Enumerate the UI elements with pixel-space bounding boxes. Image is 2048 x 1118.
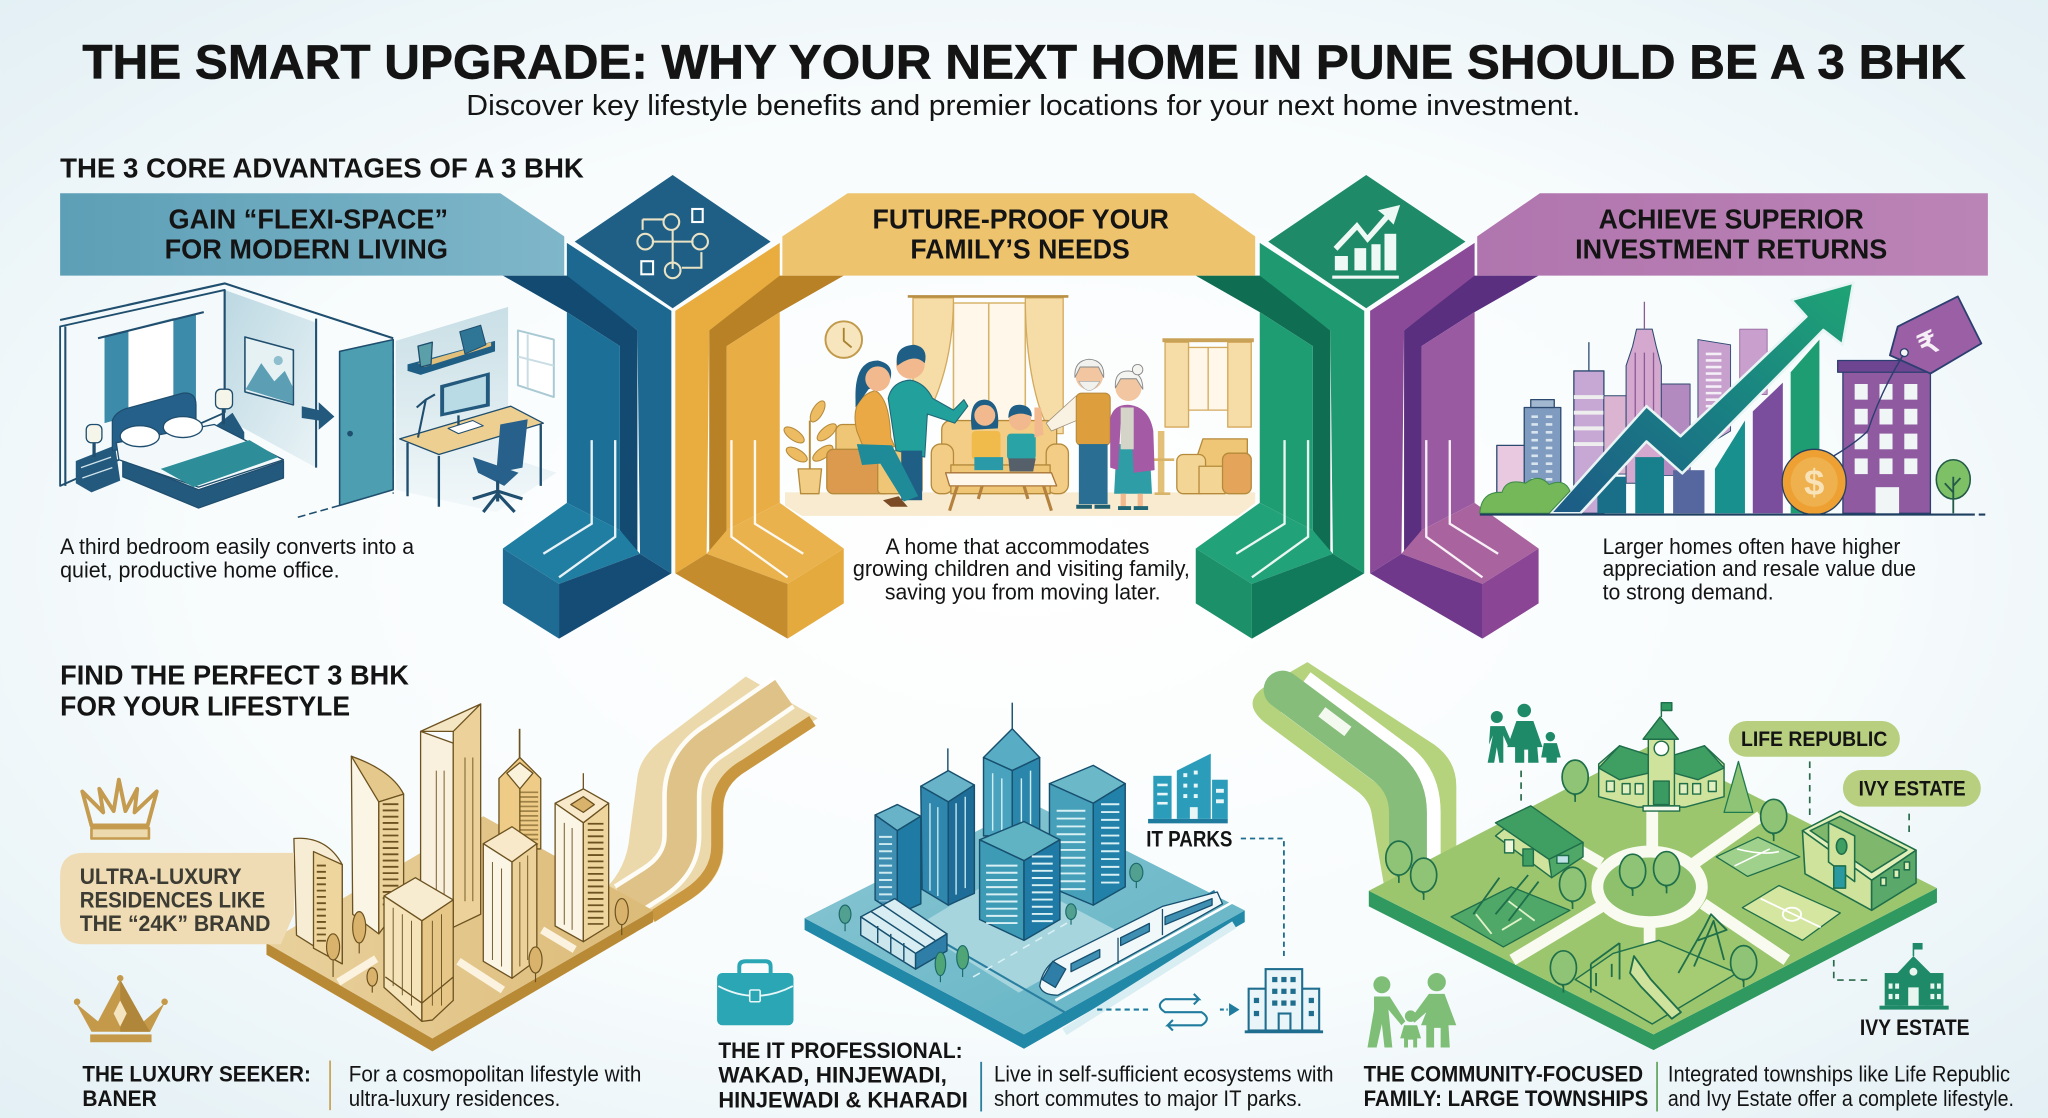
illustration: bedroom converts to office <box>60 283 556 517</box>
golden road <box>603 677 818 922</box>
tower: spire <box>499 729 541 849</box>
grandmother <box>1110 364 1155 508</box>
township trees <box>1386 760 1787 993</box>
panel: community township <box>1253 662 1937 1050</box>
text: flexi-space benefit <box>60 534 415 582</box>
icon: outline crown <box>82 780 157 838</box>
text: IT professional: THE IT PROFESSIONAL: <box>718 1038 963 1063</box>
coffee table <box>946 473 1057 511</box>
icon: light green family <box>1367 973 1456 1047</box>
icon: dark green family <box>1488 704 1561 763</box>
icon: IT parks buildings <box>1148 754 1228 823</box>
price tag with rupee: ₹ <box>1913 325 1944 363</box>
banner: flexi-space <box>60 193 564 276</box>
wall picture <box>245 337 293 405</box>
illustration: city skyline with rising arrow <box>1480 283 1985 515</box>
teal trees <box>839 863 1143 982</box>
banner: future-proof: FUTURE-PROOF YOUR <box>872 204 1169 235</box>
label: IT parks: IT PARKS <box>1146 826 1232 851</box>
bedroom walls <box>60 290 225 486</box>
tower: center <box>483 827 537 978</box>
pill: Life Republic: LIFE REPUBLIC <box>1741 728 1887 751</box>
sliding door <box>298 340 393 517</box>
text: flexi-space benefit: A third bedroom easily converts into a <box>60 534 415 559</box>
section heading: lifestyle: FOR YOUR LIFESTYLE <box>60 691 350 722</box>
text: flexi-space benefit: quiet, productive home office. <box>60 557 340 582</box>
dashed connector: IT parks to office <box>1241 838 1284 957</box>
left armchair <box>827 424 922 494</box>
panel: luxury seeker city <box>266 677 818 1051</box>
banner: investment returns: INVESTMENT RETURNS <box>1575 234 1887 265</box>
banner: future-proof <box>782 193 1255 276</box>
text: luxury seeker: For a cosmopolitan lifestyle with <box>349 1061 641 1086</box>
text: community-focused family: FAMILY: LARGE TOWNSHIPS <box>1364 1086 1648 1111</box>
office corner <box>396 307 556 512</box>
pill: Ivy Estate <box>1843 770 1981 807</box>
callout: ultra-luxury residences: ULTRA-LUXURY <box>80 864 242 889</box>
text: IT professional: WAKAD, HINJEWADI, <box>718 1063 947 1088</box>
title: THE SMART UPGRADE: WHY YOUR NEXT HOME IN PUNE SHOULD BE A 3 BHK <box>82 35 1966 89</box>
skyline <box>1497 302 1767 513</box>
text: IT professional: Live in self-sufficient ecosystems with <box>994 1061 1334 1086</box>
section heading: lifestyle <box>60 659 409 722</box>
bracket: purple connector <box>1370 243 1539 639</box>
potted plant <box>782 399 839 494</box>
text: community-focused family: and Ivy Estate offer a complete lifestyle. <box>1668 1086 2014 1111</box>
arrow <box>302 402 334 430</box>
bracket: gold connector <box>675 243 844 639</box>
playground equipment <box>1473 875 1727 1019</box>
tower: low curved <box>294 838 342 964</box>
text: luxury seeker: ultra-luxury residences. <box>349 1086 560 1111</box>
icon: commute arrows <box>1097 994 1240 1030</box>
text: luxury seeker: BANER <box>82 1086 157 1111</box>
text: future-proof benefit: growing children and visiting family, <box>853 556 1190 581</box>
low hall <box>861 899 947 969</box>
icon: flexible space diagram <box>575 175 771 308</box>
banner: investment returns: ACHIEVE SUPERIOR <box>1599 204 1864 235</box>
man <box>888 345 968 500</box>
metro train <box>1040 892 1234 1000</box>
tower: right <box>555 773 609 942</box>
text: investment benefit: appreciation and resale value due <box>1603 556 1916 581</box>
bracket: blue connector <box>503 243 671 639</box>
section heading: core advantages: THE 3 CORE ADVANTAGES OF A 3 BHK <box>60 153 584 184</box>
banner: investment returns <box>1477 193 1988 276</box>
pill: Ivy Estate: IVY ESTATE <box>1859 777 1966 800</box>
banner: flexi-space: GAIN “FLEXI-SPACE” <box>169 204 448 235</box>
pill: Life Republic <box>1729 721 1900 757</box>
text: community-focused family: Integrated townships like Life Republic <box>1668 1061 2010 1086</box>
rising arrow <box>1550 283 1853 513</box>
gold trees <box>327 899 628 993</box>
icon: Ivy Estate building <box>1879 943 1949 1010</box>
tower 2 <box>921 748 974 905</box>
school with clock tower <box>1599 703 1724 811</box>
text: community-focused family: THE COMMUNITY-FOCUSED <box>1364 1061 1643 1086</box>
text: luxury seeker <box>82 1061 641 1111</box>
illustration: multigenerational family in living room <box>782 296 1255 516</box>
township roads <box>1512 810 1787 960</box>
grandfather <box>1046 359 1110 507</box>
text: IT professional <box>718 1038 1334 1113</box>
shrubs <box>1480 478 1570 513</box>
floor <box>785 492 1255 516</box>
tree <box>1936 460 1970 513</box>
right armchair <box>1151 431 1251 494</box>
icon: growth chart <box>1268 175 1465 308</box>
label: Ivy Estate: IVY ESTATE <box>1860 1015 1970 1040</box>
bed <box>76 389 283 508</box>
tower 4 <box>1049 765 1125 905</box>
callout: ultra-luxury residences <box>60 853 294 944</box>
tower 5 <box>980 822 1060 940</box>
callout: ultra-luxury residences: RESIDENCES LIKE <box>80 888 265 913</box>
banner: flexi-space: FOR MODERN LIVING <box>165 234 448 265</box>
callout: ultra-luxury residences: THE “24K” BRAND <box>80 911 270 936</box>
green road <box>1253 662 1456 888</box>
bars <box>1597 340 1819 513</box>
coin: $ <box>1804 462 1824 503</box>
right building <box>1802 811 1916 910</box>
center sofa <box>931 421 1068 494</box>
green platform <box>1369 744 1937 1050</box>
tower: tallest <box>421 704 481 927</box>
text: community-focused family <box>1364 1061 2014 1111</box>
girl and boy on sofa <box>971 400 1044 471</box>
big window with curtains <box>908 296 1068 434</box>
purple building <box>1838 360 1930 513</box>
text: investment benefit: Larger homes often have higher <box>1603 534 1901 559</box>
ground line <box>1480 514 1985 516</box>
banner: future-proof: FAMILY’S NEEDS <box>910 234 1130 265</box>
teal platform <box>805 803 1245 1049</box>
icon: office building <box>1245 969 1323 1032</box>
panel: IT professional hub <box>805 703 1245 1049</box>
tower 1 <box>875 805 921 914</box>
text: future-proof benefit: A home that accommodates <box>886 534 1149 559</box>
section heading: lifestyle: FIND THE PERFECT 3 BHK <box>60 659 409 690</box>
price tag with rupee <box>1827 296 1981 460</box>
text: investment benefit: to strong demand. <box>1603 579 1774 604</box>
text: investment benefit <box>1603 534 1916 604</box>
side window <box>1162 338 1254 427</box>
subtitle: Discover key lifestyle benefits and premier locations for your next home investment. <box>466 90 1580 122</box>
tower: front <box>384 878 453 1021</box>
dashed lines: township callouts <box>1521 761 1909 980</box>
coin <box>1782 449 1846 515</box>
gold platform <box>266 816 653 1051</box>
text: luxury seeker: THE LUXURY SEEKER: <box>82 1061 311 1086</box>
text: future-proof benefit: saving you from moving later. <box>885 579 1160 604</box>
bracket: green connector <box>1196 243 1364 639</box>
tower 3 <box>984 703 1040 836</box>
wall clock <box>825 321 862 358</box>
left house <box>1495 806 1583 878</box>
text: IT professional: HINJEWADI & KHARADI <box>718 1088 968 1113</box>
tower: tall curved <box>351 756 404 934</box>
icon: briefcase <box>717 961 793 1025</box>
woman <box>855 360 918 507</box>
text: IT professional: short commutes to major IT parks. <box>994 1086 1302 1111</box>
icon: solid crown <box>74 975 168 1042</box>
text: future-proof benefit <box>853 534 1190 604</box>
window and curtains <box>98 312 204 423</box>
